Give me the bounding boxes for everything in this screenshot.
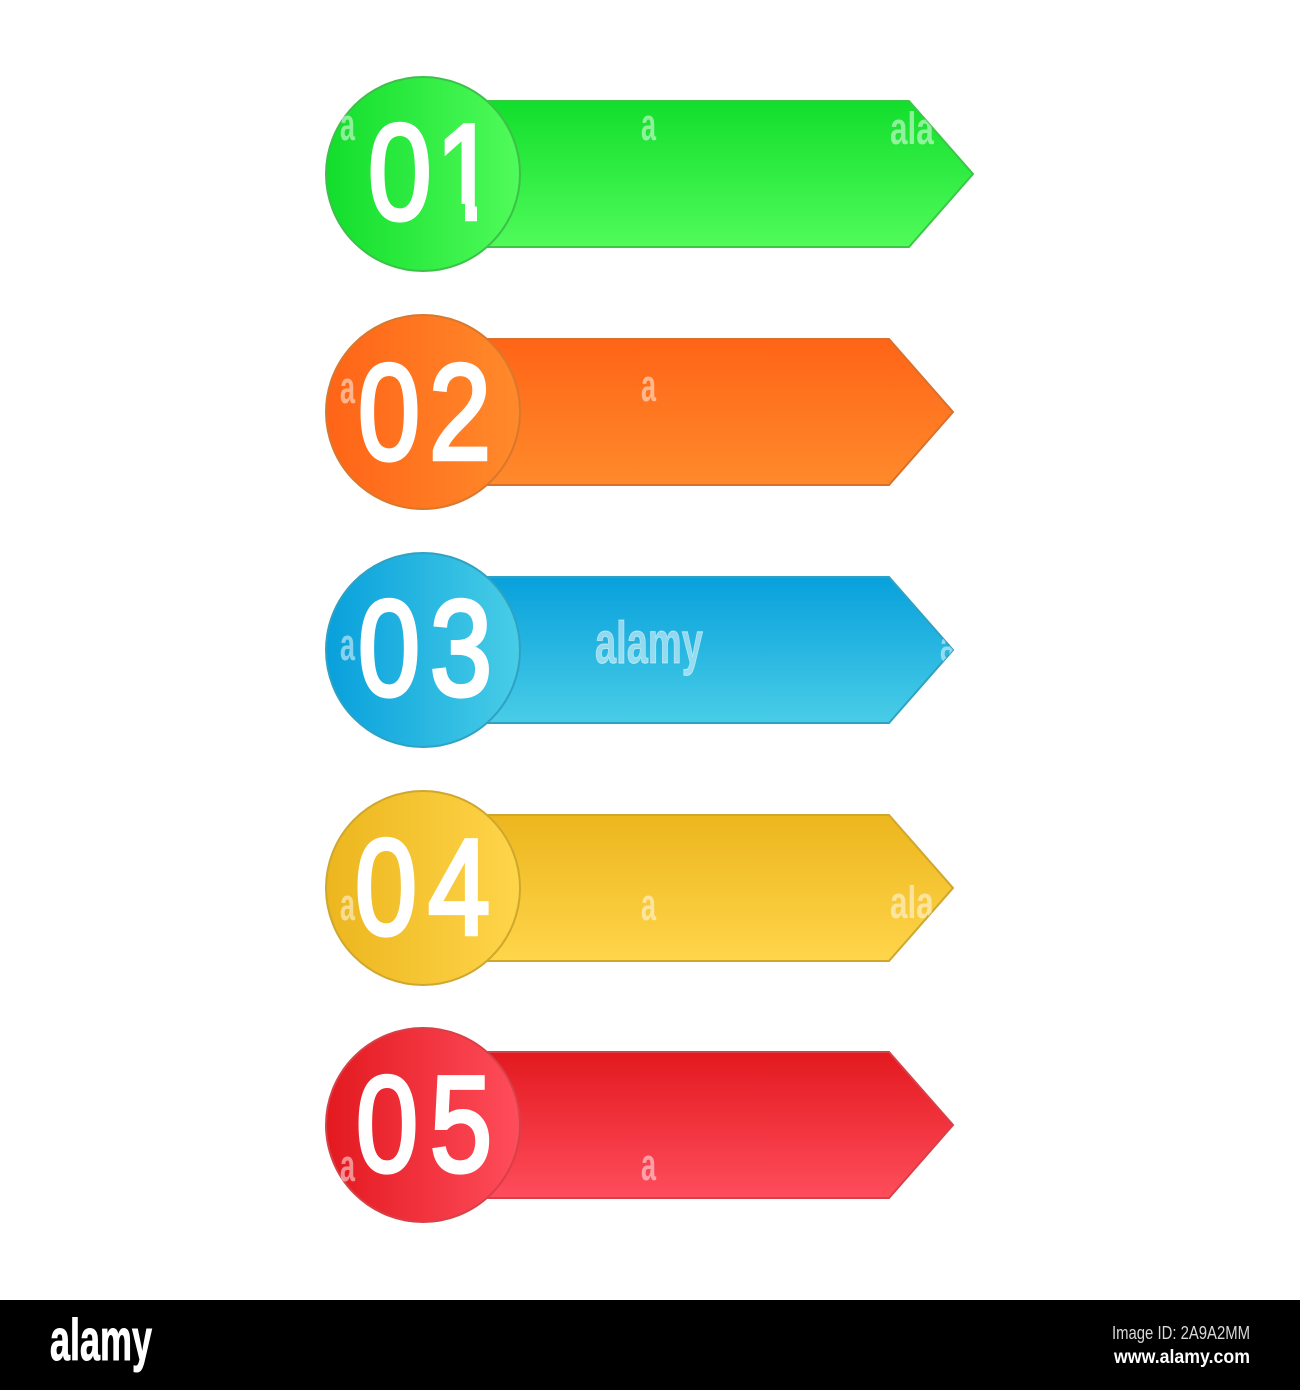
watermark fragment on red badge: a: [340, 1140, 355, 1191]
number 02: 0: [358, 337, 420, 489]
number 03: 0: [358, 573, 420, 725]
arrow: blue banner: [480, 577, 953, 723]
number 02: [358, 337, 491, 489]
number 01: 0: [368, 96, 432, 248]
watermark on blue banner: [596, 620, 953, 676]
footer bar: [0, 1300, 1300, 1390]
watermark fragments on yellow banner: ala: [890, 879, 934, 928]
footer logo: alamy: [50, 1308, 152, 1373]
watermark on blue banner: alamy: [595, 610, 703, 676]
number 04: 0: [355, 812, 417, 964]
circle: yellow badge: [326, 791, 520, 985]
arrow: yellow banner: [480, 815, 953, 961]
number 01: [370, 122, 477, 223]
arrow: green banner: [480, 101, 973, 247]
number 01: 1: [436, 98, 497, 249]
number 04: 4: [428, 812, 490, 964]
circle: orange badge: [326, 315, 520, 509]
watermark fragment on red banner: a: [641, 1139, 656, 1190]
watermark fragments on green banner: [642, 111, 934, 144]
number 03: [358, 573, 492, 725]
banner 04: [326, 791, 953, 985]
number 05: 5: [430, 1049, 492, 1201]
website: www.alamy.com: [1113, 1347, 1250, 1368]
number 05: [356, 1049, 492, 1201]
banner 05: [326, 1028, 953, 1222]
number 03: 3: [430, 573, 492, 725]
watermark fragment on yellow badge: a: [340, 879, 355, 930]
banner 01: [326, 77, 973, 271]
watermark fragments on green banner: a: [641, 99, 656, 150]
watermark fragment on green badge: a: [340, 99, 355, 150]
watermark fragment on blue badge: a: [340, 619, 355, 670]
circle: red badge: [326, 1028, 520, 1222]
arrow: orange banner: [480, 339, 953, 485]
number 04: [355, 812, 490, 964]
watermark fragments on yellow banner: [642, 885, 932, 920]
circle: blue badge: [326, 553, 520, 747]
watermark fragment on orange badge: a: [340, 362, 355, 413]
banner 02: [326, 315, 953, 509]
banner 03: [326, 553, 955, 747]
image id: Image ID: 2A9A2MM: [1112, 1323, 1250, 1343]
watermark on blue banner: a: [940, 620, 955, 671]
circle: green badge: [326, 77, 520, 271]
arrow: red banner: [480, 1052, 953, 1198]
watermark fragment on orange banner: a: [641, 360, 656, 411]
watermark fragments on green banner: ala: [890, 105, 934, 154]
number 02: 2: [429, 337, 491, 489]
number 05: 0: [356, 1049, 418, 1201]
watermark fragments on yellow banner: a: [641, 879, 656, 930]
